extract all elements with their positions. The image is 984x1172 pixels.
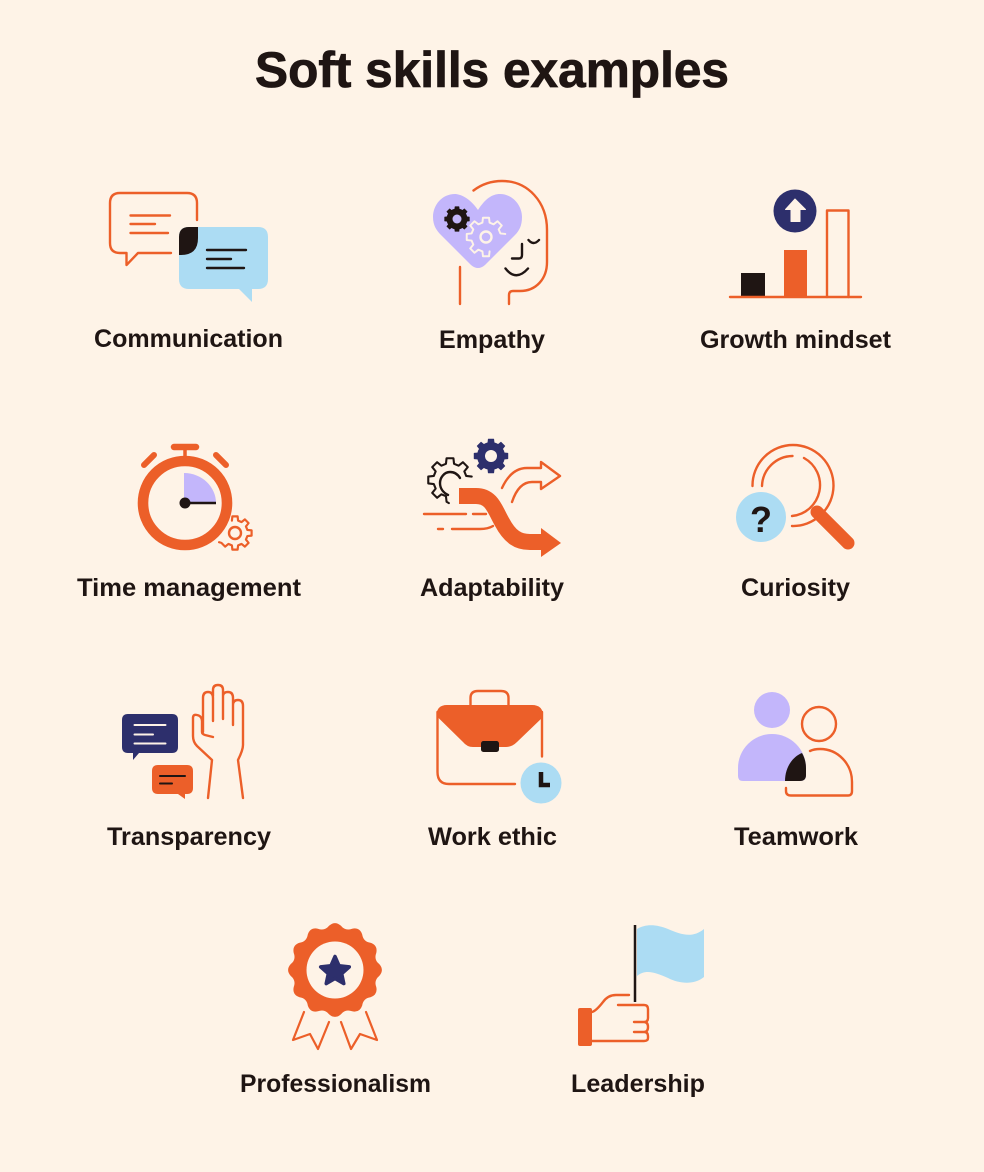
panel: Leadership [571, 925, 705, 1098]
icon: briefcase with clock [436, 691, 562, 804]
icon: magnifying glass with question mark [736, 445, 848, 543]
icon: magnifying glass with question mark: ? [750, 499, 772, 540]
title: Soft skills examples [255, 42, 729, 98]
panel: Empathy [433, 181, 547, 354]
label: Work ethic: Work ethic [428, 823, 557, 851]
panel: Transparency [107, 685, 271, 851]
icon: stopwatch with gear [143, 447, 252, 550]
label: Teamwork: Teamwork [734, 823, 858, 851]
icon: speech bubbles [110, 193, 268, 302]
label: Leadership: Leadership [571, 1070, 705, 1098]
label: Empathy: Empathy [439, 326, 545, 354]
icon: chat bubbles and raised hand [122, 685, 243, 799]
label: Professionalism: Professionalism [240, 1070, 431, 1098]
icon: two people [738, 692, 852, 796]
panel: Growth mindset [700, 190, 892, 354]
panel: Professionalism [240, 923, 431, 1098]
panel: Time management [77, 447, 302, 602]
panel: Teamwork [734, 692, 858, 851]
label: Growth mindset: Growth mindset [700, 326, 892, 354]
icon: award rosette with star [288, 923, 382, 1049]
label: Curiosity: Curiosity [741, 574, 850, 602]
label: Transparency: Transparency [107, 823, 271, 851]
icon: hand holding flag [578, 925, 704, 1046]
icon: heart and head [433, 181, 547, 304]
label: Adaptability: Adaptability [420, 574, 564, 602]
label: Communication: Communication [94, 325, 283, 353]
label: Time management: Time management [77, 574, 302, 602]
panel: Work ethic [428, 691, 562, 851]
panel: Communication [94, 193, 283, 353]
icon: bar chart with up arrow [730, 190, 861, 297]
panel: Adaptability [420, 439, 564, 602]
panel: Curiosity [736, 445, 850, 602]
icon: gears and branching arrows [424, 439, 561, 557]
